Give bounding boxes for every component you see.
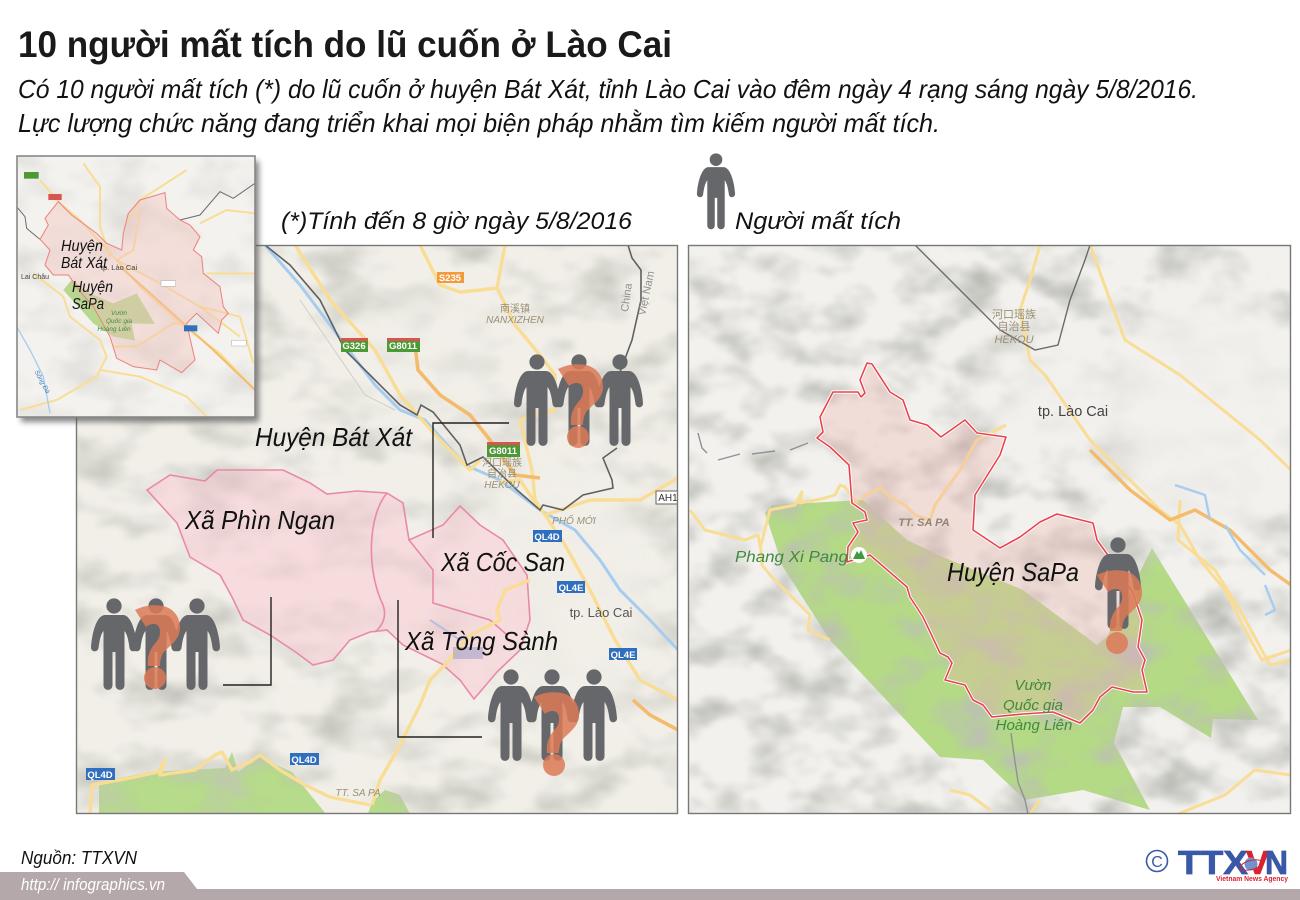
road shields: QL4D xyxy=(87,770,113,781)
road shields: QL4E xyxy=(611,650,635,661)
road shields: AH1 xyxy=(658,493,678,504)
inset roads xyxy=(20,163,255,417)
label: Huyện Bát Xát: Huyện Bát Xát xyxy=(255,422,414,452)
Sa Pa district polygon xyxy=(817,363,1147,723)
orange highway xyxy=(415,345,678,730)
inset place names: SaPa xyxy=(72,296,104,313)
inset place names: Sông Đà xyxy=(33,369,51,395)
place names: HEKOU xyxy=(484,480,521,491)
callout lines: left map xyxy=(223,423,509,737)
place names: 自治县 xyxy=(487,467,517,480)
place names: PHỐ MỚI xyxy=(552,514,596,527)
commune polygons xyxy=(147,470,530,699)
road shields: G8011 xyxy=(489,446,518,457)
logo: TTXVN: TTX xyxy=(1178,844,1248,881)
place names xyxy=(735,307,1108,734)
label: Xã Phìn Ngan: Xã Phìn Ngan xyxy=(184,505,335,535)
place names: TT. SA PA xyxy=(898,517,950,529)
road shields: G8011 xyxy=(389,341,418,352)
place names: 自治县 xyxy=(998,319,1030,333)
inset road shields xyxy=(24,172,246,346)
copyright mark: C xyxy=(1151,854,1163,871)
inset place names: Huyện xyxy=(72,279,113,296)
place names: China xyxy=(619,282,635,313)
inset place names: Vườn xyxy=(111,310,127,317)
logo: TTXVN: V xyxy=(1246,844,1269,881)
road shields: QL4D xyxy=(291,755,317,766)
icon: legend person xyxy=(697,153,735,229)
national park green area xyxy=(765,500,1258,810)
logo: TTXVN xyxy=(1146,844,1288,883)
rivers xyxy=(1175,485,1275,615)
road shields: G326 xyxy=(342,341,366,352)
place names: 河口瑶族 xyxy=(482,456,522,469)
inset place names: Bát Xát xyxy=(61,255,108,272)
inset place names: tp. Lào Cai xyxy=(101,263,137,272)
inset map shadow xyxy=(21,161,259,422)
copyright mark xyxy=(1146,850,1168,872)
icon group: three missing people, Phìn Ngan xyxy=(91,598,220,690)
inset national park xyxy=(63,280,155,341)
inset place names: Hoàng Liên xyxy=(97,326,131,333)
yellow roads xyxy=(690,245,1291,814)
intro text: Lực lượng chức năng đang triển khai mọi biện pháp nhằm tìm kiếm người mất tích. xyxy=(18,108,940,138)
national park green area xyxy=(99,752,410,814)
panel: right detail map of Sa Pa xyxy=(688,245,1300,814)
place names: 南溪镇 xyxy=(500,302,530,315)
label: Xã Tòng Sành: Xã Tòng Sành xyxy=(404,626,558,656)
intro text xyxy=(18,74,1198,138)
orange highway xyxy=(1090,450,1291,585)
road shields: QL4D xyxy=(534,532,560,543)
label: Huyện SaPa: Huyện SaPa xyxy=(947,557,1079,587)
footer url: http:// infographics.vn xyxy=(21,875,165,894)
place names: NANXIZHEN xyxy=(486,315,545,326)
intro text: Có 10 người mất tích (*) do lũ cuốn ở huyện Bát Xát, tỉnh Lào Cai vào đêm ngày 4 rạng sáng ngày 5/8/2016. xyxy=(18,74,1198,104)
label: Xã Cốc San: Xã Cốc San xyxy=(440,547,565,577)
mountain marker xyxy=(851,547,867,563)
rivers xyxy=(265,245,678,650)
title: 10 người mất tích do lũ cuốn ở Lào Cai xyxy=(18,24,672,65)
place names: 河口瑶族 xyxy=(992,307,1036,321)
icon group: three missing people, Tòng Sành xyxy=(488,669,617,776)
icon group: three missing people, Bát Xát top xyxy=(514,354,643,448)
icon group: one missing person, Sa Pa xyxy=(1095,537,1142,654)
place names: Phang Xi Pang xyxy=(735,549,848,566)
national border xyxy=(915,245,1090,350)
inset place names: Quốc gia xyxy=(106,317,132,325)
place names: tp. Lào Cai xyxy=(570,605,633,620)
road shields: S235 xyxy=(439,273,462,284)
source: Nguồn: TTXVN xyxy=(21,847,138,868)
national border xyxy=(265,245,641,510)
note: time of data: (*)Tính đến 8 giờ ngày 5/8/2016 xyxy=(281,208,632,235)
place names: Vườn xyxy=(1015,677,1051,694)
road shields: QL4E xyxy=(559,583,583,594)
logo: TTXVN: N xyxy=(1265,844,1288,881)
panel: inset location map xyxy=(17,156,255,417)
inset district outline xyxy=(40,193,228,373)
road shields xyxy=(86,272,680,781)
place names xyxy=(335,270,657,799)
place names: Hoàng Liên xyxy=(996,717,1072,734)
yellow roads xyxy=(90,245,678,814)
place names: TT. SA PA xyxy=(335,788,381,799)
place names: Việt Nam xyxy=(636,270,657,317)
place names: HEKOU xyxy=(994,334,1034,346)
inset place names xyxy=(21,238,137,395)
panel: left detail map of Bát Xát xyxy=(76,245,680,814)
inset place names: Huyện xyxy=(61,238,103,255)
logo: TTXVN: Vietnam News Agency xyxy=(1216,876,1288,883)
footer bar xyxy=(0,872,1300,900)
place names: Quốc gia xyxy=(1003,697,1063,714)
legend: missing person xyxy=(697,153,901,235)
place names: tp. Lào Cai xyxy=(1038,404,1108,420)
legend: missing person: Người mất tích xyxy=(735,208,901,235)
inset place names: Lai Châu xyxy=(21,274,49,281)
